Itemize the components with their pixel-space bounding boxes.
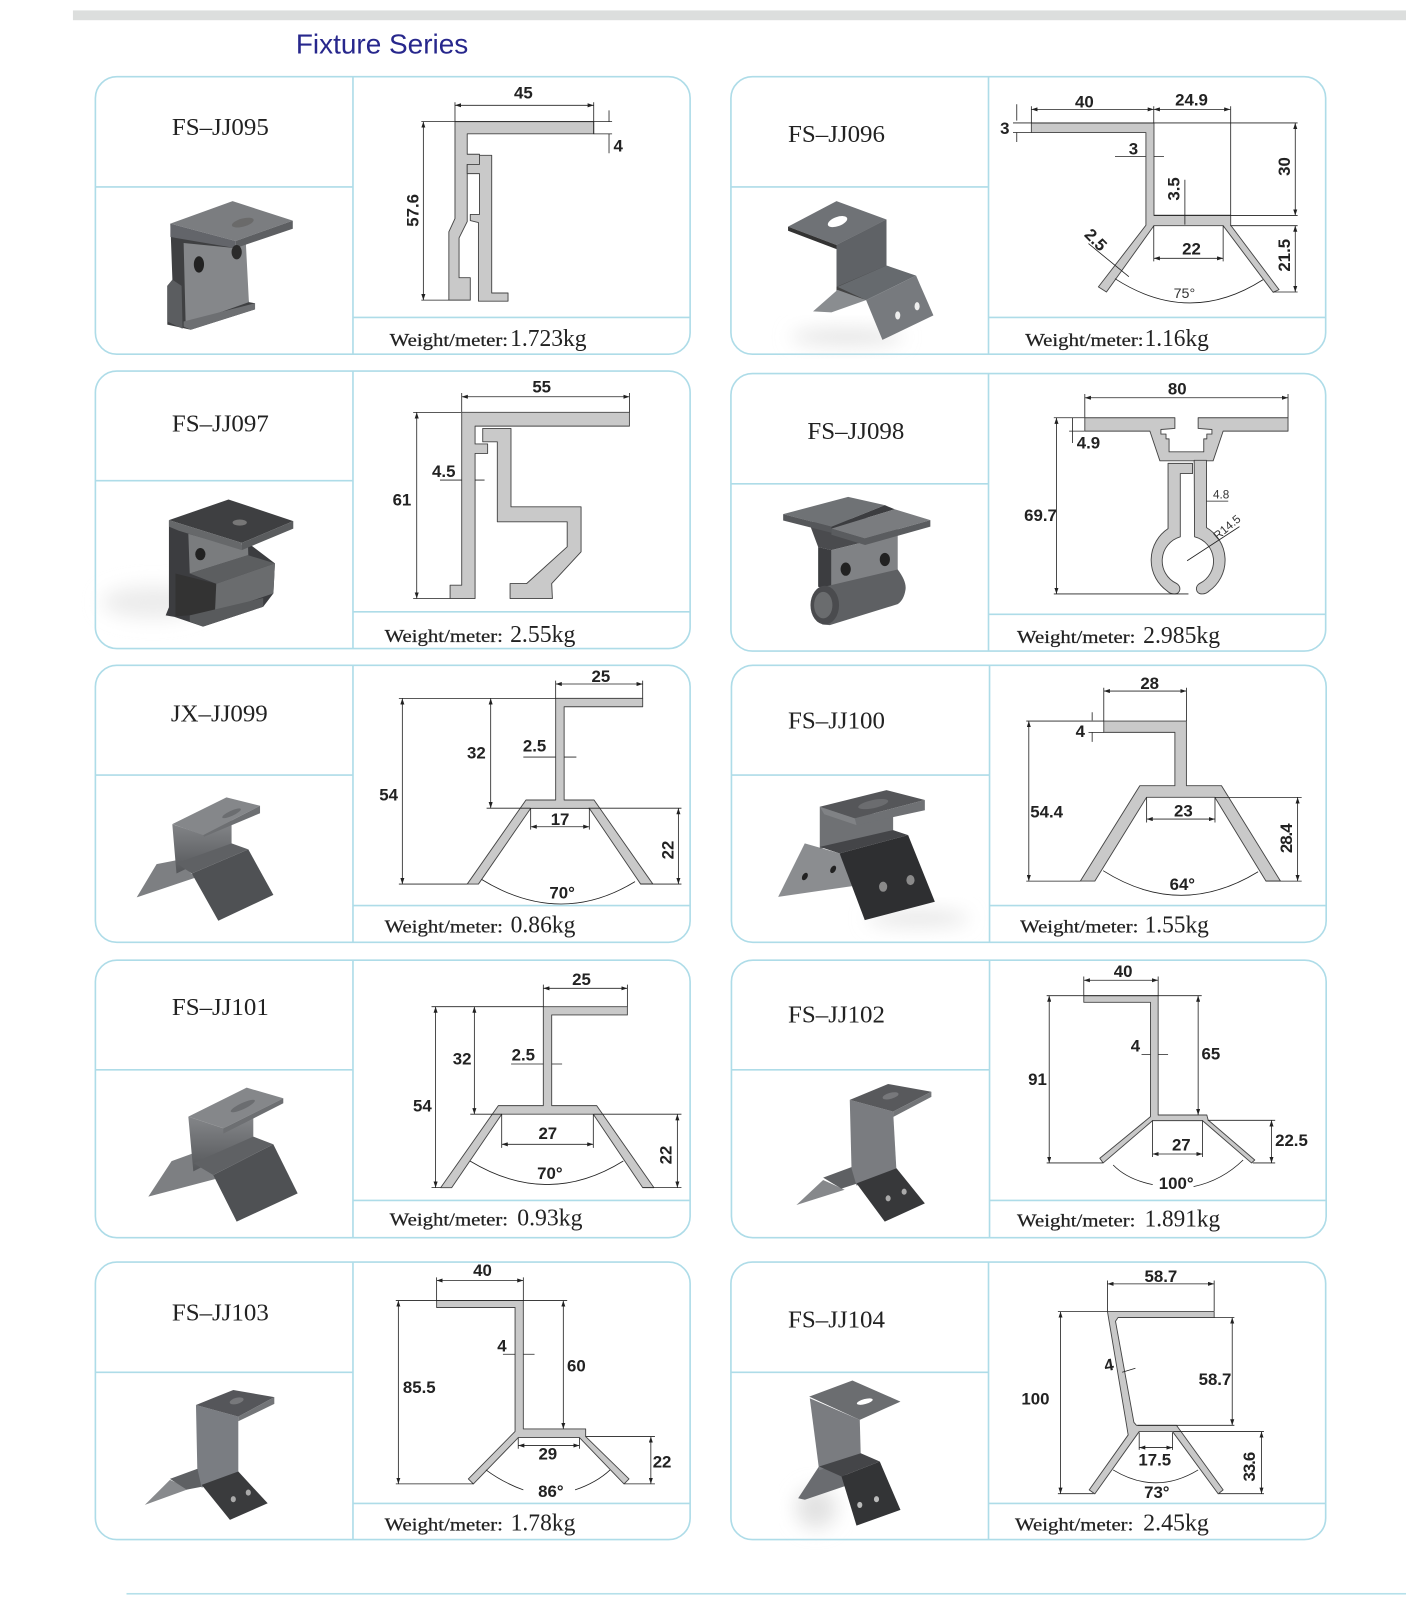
profile drawing FS-JJ103: 60 <box>567 1357 586 1376</box>
card: FS-JJ101 <box>95 960 690 1238</box>
profile drawing FS-JJ101: 2.5 <box>512 1046 535 1065</box>
icon: 3D fixture FS-JJ100 <box>778 790 969 926</box>
icon: 3D fixture FS-JJ102 <box>796 1084 931 1222</box>
top grey bar <box>73 10 1406 20</box>
profile drawing FS-JJ095 <box>404 84 624 301</box>
profile drawing FS-JJ097 <box>393 377 629 599</box>
profile drawing FS-JJ102: 40 <box>1114 962 1133 981</box>
card dividers <box>95 665 690 942</box>
profile drawing JX-JJ099: 70° <box>549 883 575 902</box>
profile drawing FS-JJ101: 32 <box>453 1050 471 1069</box>
profile drawing FS-JJ102: 22.5 <box>1275 1131 1308 1150</box>
profile drawing FS-JJ098: 80 <box>1168 379 1187 398</box>
profile drawing FS-JJ098: 69.7 <box>1024 506 1057 525</box>
weight label: Weight/meter: <box>385 917 503 937</box>
card frame <box>731 374 1326 651</box>
weight label: Weight/meter: <box>1017 1210 1135 1230</box>
card dividers <box>731 374 1325 651</box>
profile drawing FS-JJ101: 22 <box>657 1146 676 1164</box>
weight label: Weight/meter: <box>1020 917 1138 937</box>
weight label <box>385 621 575 648</box>
weight label <box>1017 1205 1220 1232</box>
card frame <box>731 1262 1326 1540</box>
card: JX-JJ099 <box>95 665 690 942</box>
weight label: 2.55kg <box>510 621 575 648</box>
profile drawing FS-JJ097: 61 <box>393 491 411 510</box>
bottom rule <box>126 1593 1406 1595</box>
weight label <box>390 1204 582 1231</box>
profile drawing FS-JJ098: R14.5 <box>1211 512 1244 543</box>
weight label: Weight/meter: <box>390 1209 508 1229</box>
icon: 3D fixture JX-JJ099 <box>137 797 273 921</box>
card dividers <box>95 77 690 354</box>
profile drawing FS-JJ101: 54 <box>413 1097 432 1116</box>
weight label <box>390 325 587 352</box>
profile drawing FS-JJ103: 85.5 <box>403 1378 436 1397</box>
card: FS-JJ103 <box>95 1261 690 1540</box>
profile drawing FS-JJ103: 4 <box>497 1336 507 1355</box>
weight label: 1.78kg <box>511 1509 575 1536</box>
profile drawing FS-JJ100: 64° <box>1170 875 1195 894</box>
profile drawing FS-JJ100: 4 <box>1076 722 1086 741</box>
profile drawing JX-JJ099 <box>379 667 681 904</box>
profile drawing JX-JJ099: 17 <box>551 810 569 829</box>
profile drawing JX-JJ099: 25 <box>591 667 610 686</box>
card frame <box>731 77 1326 354</box>
weight label: 0.86kg <box>511 912 575 939</box>
profile drawing FS-JJ104: 17.5 <box>1138 1451 1171 1470</box>
icon: 3D fixture FS-JJ097 <box>102 499 293 627</box>
icon: 3D fixture FS-JJ098 <box>783 497 930 625</box>
profile drawing FS-JJ104: 58.7 <box>1199 1370 1231 1389</box>
card frame <box>731 665 1326 942</box>
weight label: 2.45kg <box>1143 1509 1209 1536</box>
profile drawing FS-JJ102: 27 <box>1172 1135 1191 1154</box>
weight label <box>1025 325 1209 352</box>
profile drawing FS-JJ096: 22 <box>1182 240 1201 259</box>
model name: FS–JJ100 <box>788 708 885 735</box>
weight label <box>385 1509 575 1536</box>
weight label: Weight/meter: <box>1015 1514 1133 1534</box>
profile drawing FS-JJ104: 73° <box>1144 1483 1170 1502</box>
profile drawing FS-JJ101 <box>413 970 681 1188</box>
profile drawing FS-JJ095: 45 <box>514 84 533 103</box>
profile drawing FS-JJ096: 21.5 <box>1275 239 1294 272</box>
card dividers <box>731 665 1326 942</box>
card dividers <box>95 371 690 649</box>
profile drawing FS-JJ096 <box>1000 91 1298 303</box>
model name: FS–JJ096 <box>788 121 885 148</box>
card frame <box>95 77 690 354</box>
title: Fixture Series <box>296 28 468 59</box>
profile drawing FS-JJ097: 4.5 <box>432 462 455 481</box>
profile drawing FS-JJ101: 27 <box>538 1124 557 1143</box>
profile drawing JX-JJ099: 22 <box>659 841 678 859</box>
weight label: Weight/meter: <box>1017 627 1135 647</box>
profile drawing FS-JJ100: 28.4 <box>1277 823 1296 853</box>
profile drawing FS-JJ100 <box>1026 674 1302 895</box>
icon: 3D fixture FS-JJ104 <box>796 1380 900 1528</box>
profile drawing FS-JJ103: 22 <box>653 1453 671 1472</box>
card: FS-JJ104 <box>731 1262 1326 1540</box>
profile drawing FS-JJ096: 30 <box>1275 157 1294 176</box>
model name: FS–JJ098 <box>807 418 904 445</box>
profile drawing FS-JJ095: 57.6 <box>404 194 423 227</box>
model name: FS–JJ097 <box>172 411 269 438</box>
model name: FS–JJ103 <box>172 1299 269 1326</box>
profile drawing FS-JJ101: 25 <box>572 970 591 989</box>
profile drawing FS-JJ104: 58.7 <box>1145 1267 1177 1286</box>
weight label: Weight/meter: <box>385 626 503 646</box>
profile drawing JX-JJ099: 54 <box>379 785 399 804</box>
profile drawing FS-JJ102 <box>1028 962 1308 1193</box>
profile drawing FS-JJ098: 4.8 <box>1213 488 1230 501</box>
card dividers <box>95 1262 690 1540</box>
profile drawing FS-JJ102: 91 <box>1028 1070 1047 1089</box>
profile drawing FS-JJ104: 100 <box>1021 1389 1049 1408</box>
profile drawing FS-JJ096: 3.5 <box>1165 177 1184 201</box>
profile drawing FS-JJ100: 54.4 <box>1030 803 1064 822</box>
weight label: 0.93kg <box>517 1204 582 1231</box>
weight label <box>385 912 575 939</box>
weight label: 1.891kg <box>1145 1205 1220 1232</box>
profile drawing FS-JJ104: 4 <box>1103 1355 1116 1375</box>
card: FS-JJ095 <box>95 77 690 354</box>
weight label <box>1017 622 1220 649</box>
card: FS-JJ100 <box>731 665 1326 942</box>
profile drawing FS-JJ096: 3 <box>1000 119 1010 138</box>
weight label: Weight/meter: <box>385 1514 503 1534</box>
icon: 3D fixture FS-JJ096 <box>788 201 933 345</box>
weight label <box>1015 1509 1209 1536</box>
profile drawing JX-JJ099: 32 <box>467 744 486 763</box>
profile drawing FS-JJ102: 100° <box>1159 1174 1194 1193</box>
card frame <box>95 960 690 1238</box>
profile drawing FS-JJ096: 24.9 <box>1175 91 1208 110</box>
card dividers <box>731 960 1326 1238</box>
profile drawing FS-JJ098 <box>1024 379 1288 594</box>
card dividers <box>731 77 1325 354</box>
model name: FS–JJ101 <box>172 994 269 1021</box>
profile drawing FS-JJ096: 75° <box>1174 286 1195 302</box>
profile drawing FS-JJ103: 86° <box>538 1482 564 1501</box>
profile drawing FS-JJ104: 33.6 <box>1240 1452 1259 1482</box>
profile drawing FS-JJ098: 4.9 <box>1077 433 1100 452</box>
icon: 3D fixture FS-JJ103 <box>145 1390 274 1520</box>
card dividers <box>731 1262 1325 1540</box>
card: FS-JJ102 <box>731 960 1326 1238</box>
profile drawing FS-JJ100: 28 <box>1140 674 1159 693</box>
profile drawing FS-JJ097: 55 <box>532 377 551 396</box>
card frame <box>95 665 690 942</box>
model name: FS–JJ102 <box>788 1001 885 1028</box>
icon: 3D fixture FS-JJ101 <box>148 1088 298 1222</box>
weight label: Weight/meter: <box>390 330 508 350</box>
profile drawing FS-JJ096: 2.5 <box>1081 225 1111 255</box>
model name: JX–JJ099 <box>171 700 268 727</box>
profile drawing FS-JJ103: 40 <box>473 1261 492 1280</box>
weight label: 1.723kg <box>510 325 587 352</box>
profile drawing FS-JJ101: 70° <box>537 1164 563 1183</box>
model name: FS–JJ095 <box>172 114 269 141</box>
icon: 3D fixture FS-JJ095 <box>167 201 293 330</box>
profile drawing FS-JJ103 <box>396 1261 671 1501</box>
card: FS-JJ096 <box>731 77 1326 354</box>
card: FS-JJ097 <box>95 371 690 649</box>
weight label <box>1020 912 1209 939</box>
card frame <box>731 960 1326 1238</box>
profile drawing FS-JJ103: 29 <box>538 1444 557 1463</box>
card dividers <box>95 960 690 1238</box>
profile drawing FS-JJ095: 4 <box>614 137 624 156</box>
profile drawing FS-JJ104 <box>1021 1267 1264 1502</box>
weight label: 2.985kg <box>1143 622 1220 649</box>
profile drawing FS-JJ102: 65 <box>1202 1045 1220 1064</box>
weight label: Weight/meter: <box>1025 330 1144 350</box>
weight label: 1.55kg <box>1145 912 1209 939</box>
weight label: 1.16kg <box>1145 325 1209 352</box>
profile drawing FS-JJ100: 23 <box>1174 802 1193 821</box>
card frame <box>95 1262 690 1540</box>
card: FS-JJ098 <box>731 374 1326 651</box>
profile drawing FS-JJ096: 40 <box>1075 93 1094 112</box>
profile drawing FS-JJ096: 3 <box>1129 140 1138 159</box>
card frame <box>95 371 690 649</box>
profile drawing JX-JJ099: 2.5 <box>523 736 546 755</box>
model name: FS–JJ104 <box>788 1306 885 1333</box>
profile drawing FS-JJ102: 4 <box>1131 1036 1141 1055</box>
